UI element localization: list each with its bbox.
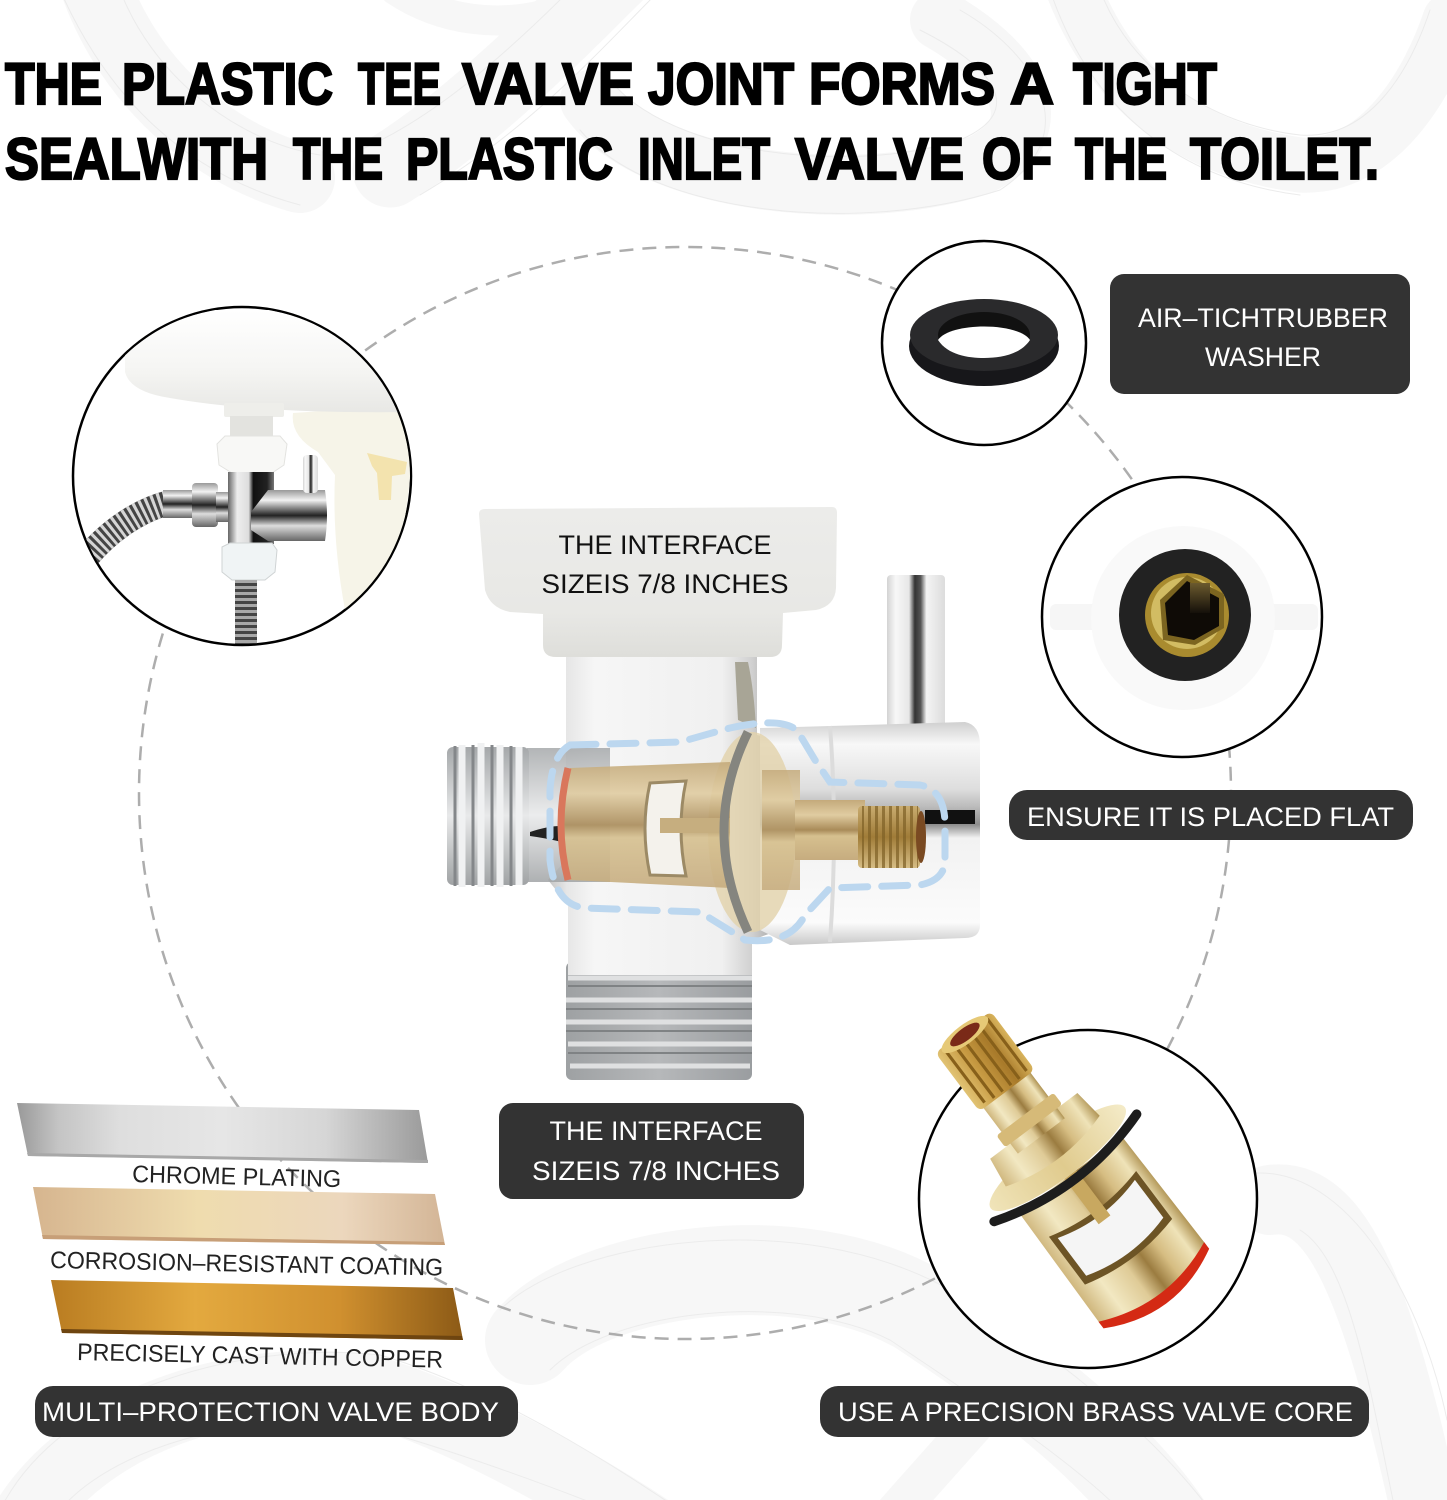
flange <box>978 1090 1138 1225</box>
title: VALVE <box>462 52 634 117</box>
core barrel <box>1018 1135 1216 1338</box>
plastic nut and thread <box>217 403 287 473</box>
title: SEALWITH <box>5 127 268 192</box>
o-ring <box>994 1114 1145 1233</box>
callout: interface size: THE INTERFACE <box>550 1116 762 1146</box>
cap text: THE INTERFACE <box>558 530 772 560</box>
layer: chrome plating: CHROME PLATING <box>132 1161 341 1193</box>
splined head <box>935 1011 1035 1112</box>
flexible hose down <box>235 580 257 650</box>
toilet cistern underside <box>125 310 420 620</box>
panel: brass valve core photo <box>888 973 1257 1368</box>
layer: corrosion-resistant coating: CORROSION–RESISTANT COATING <box>50 1247 443 1282</box>
title: THE <box>1075 127 1167 192</box>
panel: rubber washer photo <box>882 241 1086 445</box>
title: A <box>1010 52 1054 117</box>
background swirls: bottom <box>0 1173 1447 1500</box>
dashed connecting ring <box>139 247 1231 1339</box>
callout: interface size: SIZEIS 7/8 INCHES <box>532 1156 780 1186</box>
callout: multi-protection valve body: MULTI–PROTECTION VALVE BODY <box>42 1397 499 1427</box>
plastic nut wings <box>1050 604 1318 630</box>
chrome tee fitting <box>163 455 327 544</box>
callout: ensure it is placed flat <box>1009 790 1413 840</box>
brass insert <box>1145 573 1229 657</box>
white plastic cap <box>479 507 837 657</box>
handle lever <box>887 575 945 735</box>
lower nut <box>222 543 277 580</box>
brass valve core <box>888 973 1238 1357</box>
callout: multi-protection valve body <box>35 1386 518 1437</box>
title: JOINT <box>648 52 794 117</box>
blue dashed water path <box>550 723 945 941</box>
title: TEE <box>358 52 441 117</box>
flexible hose left <box>88 503 168 556</box>
stem <box>979 1066 1065 1154</box>
callout: precision brass valve core <box>820 1386 1369 1437</box>
red seal <box>1098 1242 1220 1343</box>
panel: seated washer photo <box>1042 477 1322 757</box>
layer: cast copper <box>51 1280 463 1374</box>
title: TIGHT <box>1073 52 1217 117</box>
main valve illustration <box>447 507 980 1080</box>
translucent brass core overlay <box>561 732 926 932</box>
callout: precision brass valve core: USE A PRECISION BRASS VALVE CORE <box>838 1397 1353 1427</box>
callout: air-tight rubber washer: WASHER <box>1205 342 1321 372</box>
title: PLASTIC <box>122 52 333 117</box>
layer: cast copper: PRECISELY CAST WITH COPPER <box>77 1339 443 1374</box>
chrome body vertical <box>548 657 780 975</box>
callout: air-tight rubber washer <box>1110 274 1410 394</box>
title: VALVE <box>795 127 964 192</box>
callout: interface size <box>499 1103 804 1199</box>
title: INLET <box>638 127 770 192</box>
callout: ensure it is placed flat: ENSURE IT IS PLACED FLAT <box>1027 802 1394 832</box>
window <box>1049 1171 1177 1290</box>
title: THE <box>293 127 383 192</box>
panel: valve body material layers <box>17 1103 463 1374</box>
title: OF <box>982 127 1052 192</box>
callout: air-tight rubber washer: AIR–TICHTRUBBER <box>1138 303 1388 333</box>
hex shoulder <box>987 1091 1105 1194</box>
layer: chrome plating <box>17 1103 428 1193</box>
title: THE <box>5 52 102 117</box>
cap text: SIZEIS 7/8 INCHES <box>542 569 788 599</box>
right housing <box>760 722 980 945</box>
rubber seal <box>1119 549 1251 681</box>
background swirls: top <box>60 0 1447 213</box>
panel: toilet installation photo <box>73 307 420 650</box>
lower thread <box>566 962 752 1080</box>
title <box>5 52 1379 192</box>
title: FORMS <box>809 52 995 117</box>
layer: corrosion-resistant coating <box>33 1187 445 1282</box>
cap text <box>542 530 788 599</box>
icon: rubber washer <box>909 299 1059 386</box>
left threaded outlet <box>447 743 610 887</box>
title: TOILET. <box>1190 127 1379 192</box>
title: PLASTIC <box>406 127 613 192</box>
